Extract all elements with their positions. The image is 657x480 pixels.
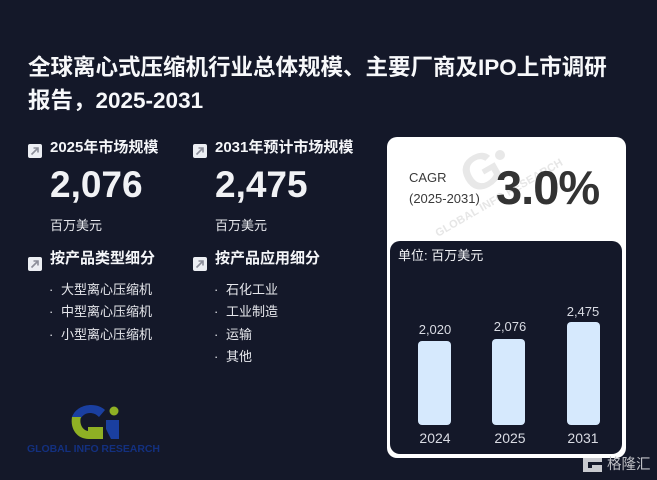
icon: arrow — [193, 257, 207, 271]
CAGR label: CAGR — [409, 170, 447, 185]
unit: 百万美元 — [215, 218, 267, 233]
value: 2,076 — [494, 319, 526, 334]
panel: CAGR card — [387, 137, 626, 458]
list — [49, 282, 152, 342]
year: 2025 — [494, 430, 526, 446]
list item: · — [214, 282, 218, 297]
watermark label: 格隆汇 — [607, 457, 650, 473]
list — [214, 282, 278, 364]
bar — [567, 322, 600, 425]
panel: bar chart — [390, 241, 622, 454]
year: 2024 — [419, 430, 451, 446]
icon: watermark logo — [583, 458, 602, 472]
value: 2,020 — [419, 322, 451, 337]
value: 2,475 — [567, 304, 599, 319]
unit: 百万美元 — [50, 218, 102, 233]
list item: · — [49, 282, 53, 297]
bar — [492, 339, 525, 425]
CAGR value: 3.0% — [496, 161, 599, 214]
list item: · — [49, 304, 53, 319]
panel: segmentation by application — [193, 250, 320, 364]
bar — [418, 341, 451, 425]
chart unit: 单位: 百万美元 — [398, 248, 483, 263]
list item: · — [214, 304, 218, 319]
title: 全球离心式压缩机行业总体规模、主要厂商及IPO上市调研 — [28, 55, 607, 80]
icon: arrow — [28, 144, 42, 158]
logo: Global Info Research: GLOBAL INFO RESEARCH — [27, 443, 160, 455]
logo: Global Info Research — [27, 405, 160, 455]
heading: 2025年市场规模 — [50, 138, 158, 156]
list item: 工业制造 — [226, 304, 278, 319]
bar 2031 — [567, 304, 600, 446]
panel: segmentation by product type — [28, 250, 155, 342]
list item: 大型离心压缩机 — [61, 282, 152, 297]
icon: arrow — [193, 144, 207, 158]
CAGR label: (2025-2031) — [409, 191, 480, 206]
list item: · — [214, 349, 218, 364]
list item: · — [214, 327, 218, 342]
list item: 小型离心压缩机 — [61, 327, 152, 342]
panel: 2025 market size — [28, 138, 158, 233]
list item: 运输 — [226, 327, 252, 342]
watermark: GLOBAL INFO RESEARCH — [434, 157, 565, 240]
bar 2025 — [492, 319, 526, 446]
year: 2031 — [567, 430, 599, 446]
heading: 按产品类型细分 — [50, 250, 155, 267]
heading: 按产品应用细分 — [215, 250, 320, 267]
icon: arrow — [28, 257, 42, 271]
list item: 其他 — [226, 349, 252, 364]
source watermark — [583, 456, 650, 473]
CAGR label — [409, 170, 480, 206]
title: 报告，2025-2031 — [28, 88, 203, 113]
panel: 2031 forecast market size — [193, 138, 353, 233]
list item: 石化工业 — [226, 282, 278, 297]
bar 2024 — [418, 322, 451, 446]
value: 2,076 — [50, 164, 143, 205]
title — [28, 55, 607, 113]
list item: · — [49, 327, 53, 342]
value: 2,475 — [215, 164, 308, 205]
heading: 2031年预计市场规模 — [215, 138, 353, 156]
list item: 中型离心压缩机 — [61, 304, 152, 319]
